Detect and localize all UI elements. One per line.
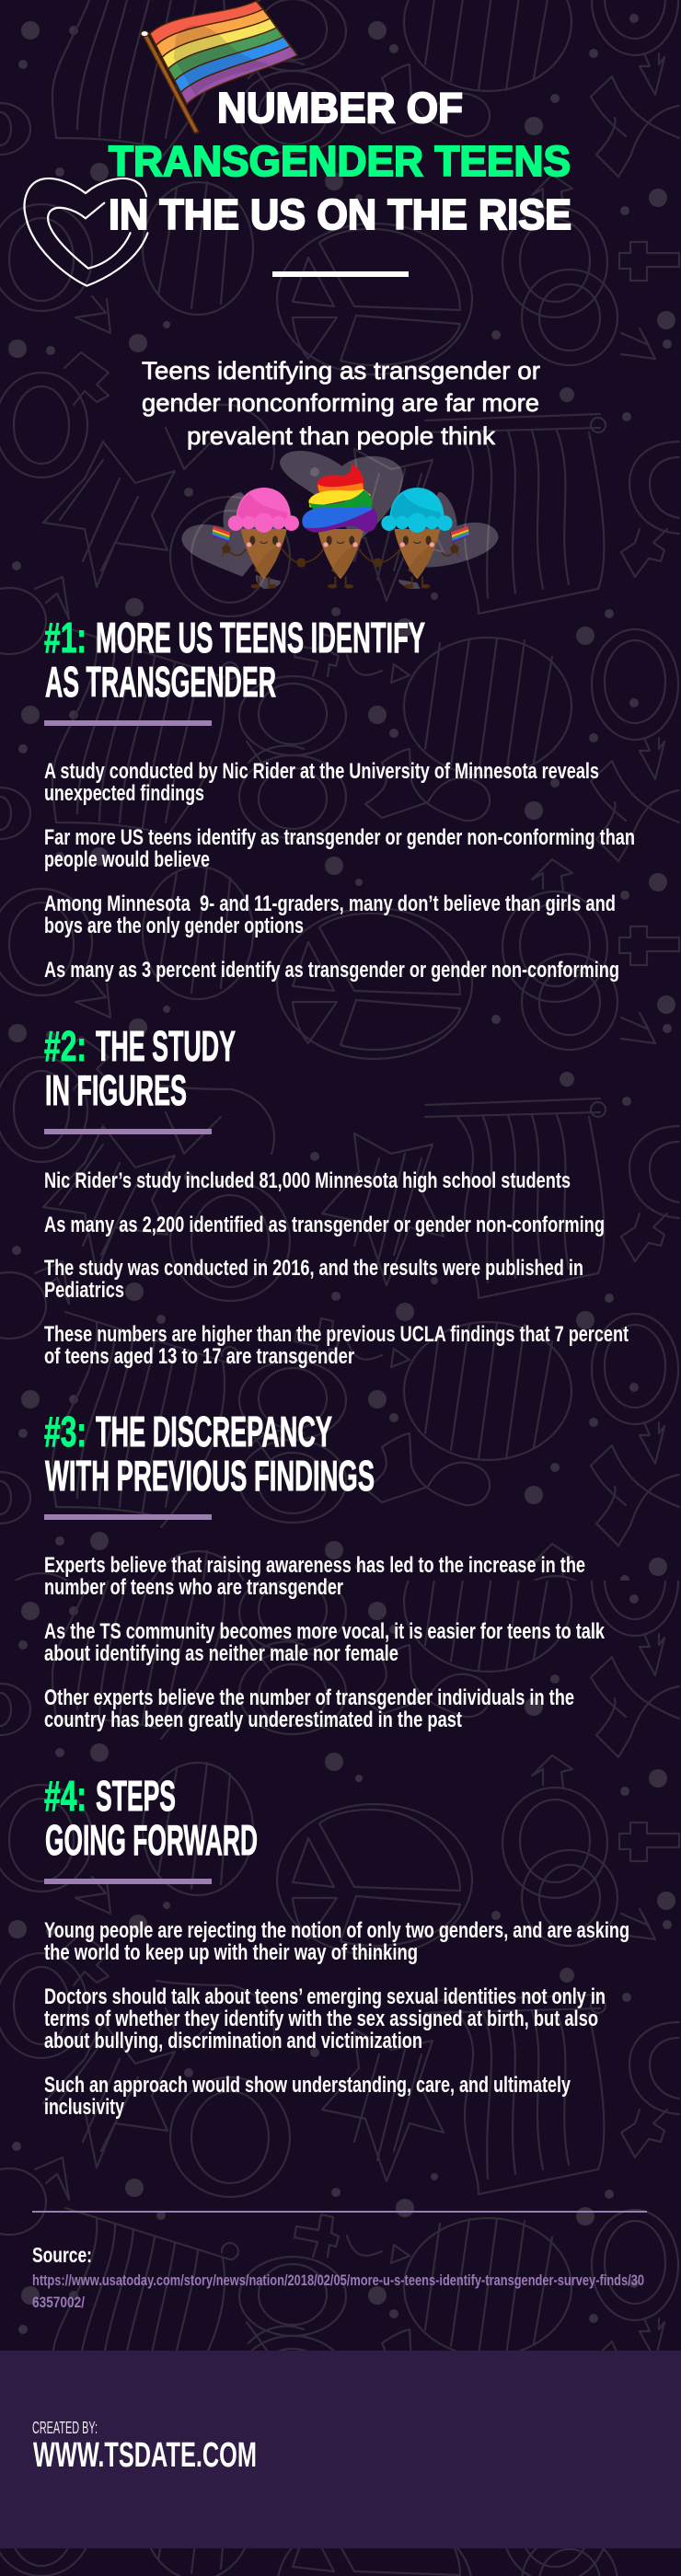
section 2 heading: #2: xyxy=(44,1022,87,1070)
title underline xyxy=(272,271,409,277)
source block: Source: xyxy=(32,2243,92,2267)
translucent hearts xyxy=(181,451,499,589)
section 1 heading: #1: xyxy=(44,614,87,661)
source block: 6357002/ xyxy=(32,2294,85,2311)
section 4 text xyxy=(44,1918,629,2120)
pink cone xyxy=(228,488,299,589)
section 1 heading: AS TRANSGENDER xyxy=(45,658,276,706)
intro text: gender nonconforming are far more xyxy=(142,389,539,417)
section 2 text: of teens aged 13 to 17 are transgender xyxy=(44,1344,354,1369)
section 4 text: the world to keep up with their way of thinking xyxy=(44,1940,418,1965)
section 2 heading: IN FIGURES xyxy=(45,1066,187,1114)
section 3 heading: THE DISCREPANCY xyxy=(96,1408,332,1455)
section 4 heading xyxy=(44,1772,258,1864)
section 2 text: Pediatrics xyxy=(44,1278,124,1303)
section 4 heading: STEPS xyxy=(96,1772,176,1820)
intro text: Teens identifying as transgender or xyxy=(142,357,540,385)
section 1 divider xyxy=(44,720,212,726)
section 1 heading xyxy=(44,614,425,706)
section 2 heading: THE STUDY xyxy=(96,1022,236,1070)
icon: rainbow pride flag xyxy=(141,1,297,132)
section 3 heading: WITH PREVIOUS FINDINGS xyxy=(45,1452,375,1500)
title: NUMBER OF xyxy=(217,84,463,132)
section 4 text: inclusivity xyxy=(44,2095,124,2120)
title: TRANSGENDER TEENS xyxy=(109,137,571,185)
section 1 text: boys are the only gender options xyxy=(44,914,304,938)
section 3 text: country has been greatly underestimated in the past xyxy=(44,1708,462,1732)
rainbow cone xyxy=(302,463,377,589)
section 3 heading xyxy=(44,1408,375,1500)
section 4 text: about bullying, discrimination and victimization xyxy=(44,2029,422,2053)
section 2 heading xyxy=(44,1022,236,1114)
section 3 divider xyxy=(44,1514,212,1520)
section 3 text: number of teens who are transgender xyxy=(44,1575,343,1600)
section 1 text: unexpected findings xyxy=(44,781,204,806)
illustration: three ice cream cones holding hands xyxy=(181,451,499,589)
section 3 text: about identifying as neither male nor female xyxy=(44,1641,398,1666)
intro text xyxy=(142,357,540,450)
section 1 text: people would believe xyxy=(44,847,210,872)
footer band xyxy=(0,2351,681,2548)
section 3 heading: #3: xyxy=(44,1408,87,1455)
intro text: prevalent than people think xyxy=(187,422,496,450)
section 1 heading: MORE US TEENS IDENTIFY xyxy=(96,614,425,661)
footer band: CREATED BY: xyxy=(32,2419,98,2437)
section 4 divider xyxy=(44,1879,212,1884)
section 2 divider xyxy=(44,1129,212,1134)
title: IN THE US ON THE RISE xyxy=(109,190,571,238)
title xyxy=(109,84,571,238)
section 3 text xyxy=(44,1553,605,1732)
section 4 heading: GOING FORWARD xyxy=(45,1816,258,1864)
source block xyxy=(32,2211,647,2311)
section 4 heading: #4: xyxy=(44,1772,87,1820)
arms and hands xyxy=(227,549,455,563)
icon: heart outline xyxy=(25,178,147,286)
section 1 text xyxy=(44,759,635,983)
section 2 text xyxy=(44,1168,629,1369)
footer band: WWW.TSDATE.COM xyxy=(33,2436,257,2475)
mini pride flags xyxy=(212,526,469,557)
blue cone xyxy=(381,488,453,589)
